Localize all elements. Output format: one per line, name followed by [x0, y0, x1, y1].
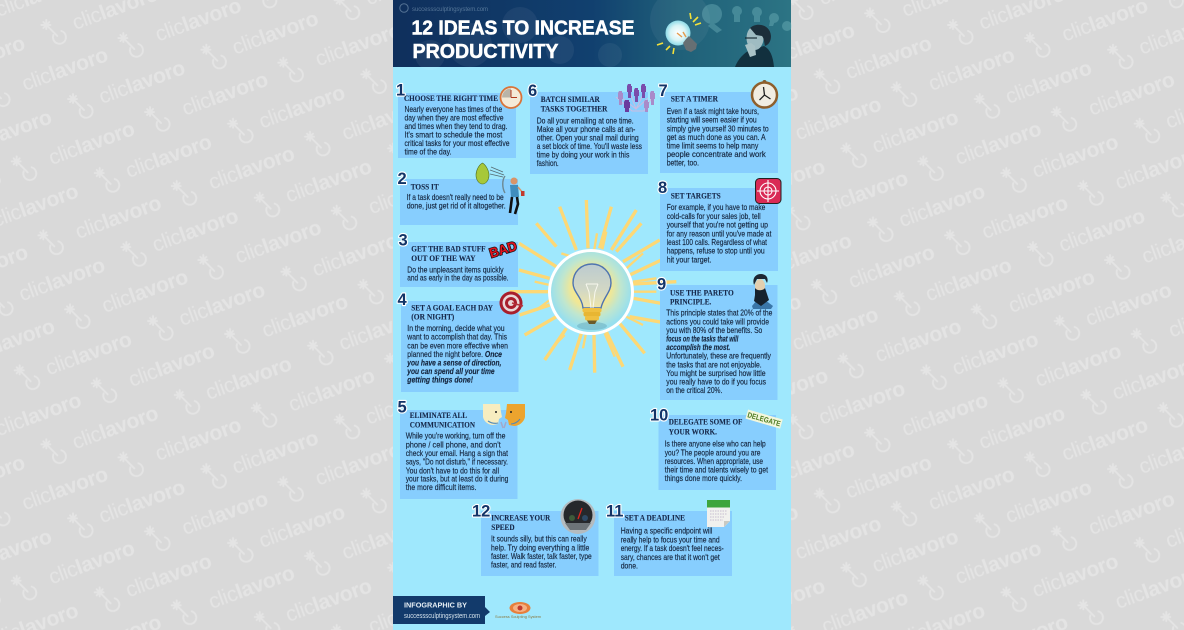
- text block: happens, refuse to stop until you: [667, 247, 765, 256]
- text block: It's smart to schedule the most: [404, 130, 503, 140]
- text block: getting things done!: [406, 375, 473, 384]
- heading: [670, 287, 734, 307]
- number 12: 12: [472, 503, 490, 521]
- number 2: 2: [398, 170, 407, 188]
- heading: TOSS IT: [411, 181, 439, 191]
- text block: a set block of time. You'll waste less: [537, 142, 642, 151]
- text block: day when they are most effective: [404, 114, 504, 122]
- text block: It sounds silly, but this can really: [491, 535, 587, 544]
- text block: sary, chances are that it won't get: [621, 553, 720, 562]
- icon: balloon and man: [476, 163, 524, 214]
- sun rays: [510, 200, 676, 373]
- icon: faint chalk bulbs: [702, 4, 792, 33]
- icon: light bulb: [573, 264, 611, 330]
- heading: SPEED: [491, 522, 515, 532]
- text block: better, too.: [667, 159, 699, 168]
- text block: fashion.: [537, 159, 559, 168]
- panel: card 7 set a timer: [658, 80, 778, 173]
- text block: phone / cell phone, and don't: [406, 440, 501, 449]
- text block: accomplish the most.: [666, 343, 730, 352]
- text block: [407, 193, 506, 210]
- number 10: 10: [650, 406, 668, 424]
- heading: DELEGATE SOME OF: [669, 417, 742, 427]
- text block: time of the day.: [404, 148, 452, 156]
- number 8: 8: [658, 179, 667, 197]
- text block: [406, 432, 509, 492]
- text block: yourself that you're not getting up: [667, 221, 768, 230]
- heading: (OR NIGHT): [411, 312, 454, 322]
- panel: card 1 choose the right time: [396, 82, 522, 158]
- footer tag: INFOGRAPHIC BY: [404, 601, 467, 610]
- text block: least 100 calls. Regardless of what: [667, 238, 768, 247]
- text block: For example, if you have to make: [667, 203, 766, 212]
- text block: can be even more effective when: [407, 341, 508, 350]
- panel: card 12 increase speed: [472, 499, 598, 576]
- text block: Do the unpleasant items quickly: [407, 265, 504, 274]
- icon: speedometer: [560, 499, 596, 534]
- icon: pocket watch: [752, 80, 777, 108]
- text block: [621, 527, 724, 570]
- icon: red target: [756, 178, 781, 204]
- text block: the more difficult items.: [406, 483, 476, 492]
- text block: get as much done as you can. A: [667, 133, 766, 142]
- panel: card 2 toss it: [398, 163, 524, 225]
- text block: [406, 324, 508, 384]
- text block: energy. If a task doesn't feel neces-: [621, 544, 724, 553]
- text block: faster, and read faster.: [491, 560, 556, 569]
- heading: SET A DEADLINE: [625, 512, 685, 522]
- text block: people concentrate and work: [667, 150, 767, 159]
- text block: planned the night before. Once: [407, 350, 502, 359]
- text block: check your email. Hang a sign that: [406, 449, 509, 458]
- number 5: 5: [398, 398, 407, 416]
- heading: CHOOSE THE RIGHT TIME: [404, 93, 498, 103]
- number 9: 9: [657, 275, 666, 293]
- text block: Even if a task might take hours,: [667, 107, 759, 116]
- heading: OUT OF THE WAY: [411, 253, 476, 263]
- text block: [407, 265, 509, 283]
- text block: time limit seems to help many: [667, 142, 759, 151]
- footer tag: [393, 596, 490, 624]
- heading: TASKS TOGETHER: [541, 103, 608, 113]
- text block: things done more quickly.: [665, 474, 742, 483]
- text block: [665, 440, 769, 483]
- number 1: 1: [396, 82, 405, 100]
- text block: you with 80% of the benefits. So: [666, 326, 763, 335]
- copyright line: [400, 4, 488, 13]
- text block: You might be surprised how little: [666, 369, 766, 378]
- text block: If a task doesn't really need to be: [407, 193, 504, 202]
- text block: [666, 309, 773, 395]
- heading: COMMUNICATION: [410, 419, 476, 429]
- text block: says, "Do not disturb," if necessary.: [406, 458, 508, 467]
- heading: SET A TIMER: [671, 94, 719, 104]
- text block: Having a specific endpoint will: [621, 527, 713, 536]
- text block: help. Try doing everything a little: [491, 543, 590, 552]
- panel: card 3 bad stuff: [398, 232, 519, 287]
- text block: simply give yourself 30 minutes to: [667, 124, 769, 133]
- footer logo: [495, 602, 541, 619]
- text block: Is there anyone else who can help: [665, 440, 766, 449]
- panel: card 6 batch similar tasks: [528, 82, 655, 174]
- heading: [541, 94, 608, 113]
- text block: [404, 105, 510, 156]
- panel: card 11 set a deadline: [606, 500, 732, 576]
- heading: USE THE PARETO: [670, 287, 734, 297]
- icon: clock: [500, 87, 522, 108]
- text block: hit your target.: [667, 255, 711, 264]
- text block: While you're working, turn off the: [406, 432, 506, 441]
- text block: In the morning, decide what you: [407, 324, 505, 333]
- infographic content: [393, 0, 792, 630]
- text block: [537, 116, 642, 168]
- text block: [667, 107, 769, 168]
- heading: SET TARGETS: [671, 191, 721, 201]
- icon: archery target: [500, 292, 523, 314]
- heading: [491, 512, 551, 532]
- text block: Make all your phone calls at an-: [537, 125, 636, 134]
- number 4: 4: [398, 291, 408, 309]
- heading: BATCH SIMILAR: [541, 94, 600, 104]
- text block: resources. When appropriate, use: [665, 457, 763, 466]
- text block: for any reason until you've made at: [667, 229, 772, 238]
- text block: your tasks, but at least do it during: [406, 475, 509, 484]
- icon: delegate tag: DELEGATE: [746, 410, 782, 428]
- text block: Unfortunately, these are frequently: [666, 352, 772, 361]
- heading: SET A GOAL EACH DAY: [411, 302, 494, 312]
- infographic panel background: [393, 0, 791, 630]
- heading: [411, 302, 494, 322]
- heading: GET THE BAD STUFF: [411, 244, 486, 254]
- text block: focus on the tasks that will: [666, 335, 739, 344]
- footer tag: successsculptingsystem.com: [404, 613, 480, 620]
- text block: faster. Walk faster, talk faster, type: [491, 552, 592, 561]
- text block: their time and talents wisely to get: [665, 466, 769, 475]
- text block: done.: [621, 561, 638, 570]
- icon: Pareto portrait: [752, 274, 773, 309]
- text block: other. Open your snail mail during: [537, 133, 639, 142]
- title: PRODUCTIVITY: [412, 40, 559, 63]
- central bulb with sun rays: [510, 200, 676, 373]
- header banner: [393, 0, 792, 70]
- bulb disc: [550, 250, 632, 334]
- number 11: 11: [606, 503, 623, 521]
- icon: people network: [616, 84, 655, 112]
- heading: INCREASE YOUR: [491, 512, 551, 522]
- text block: starting will seem easier if you: [667, 116, 757, 125]
- panel: card 8 set targets: [658, 178, 781, 271]
- icon: thinking man: [735, 25, 774, 67]
- icon: talking masks: [483, 404, 525, 428]
- heading: [411, 244, 486, 263]
- panel: card 9 pareto: [657, 274, 778, 400]
- title: 12 IDEAS TO INCREASE: [412, 16, 634, 40]
- heading: YOUR WORK.: [669, 426, 717, 436]
- text block: actions you could take will provide: [666, 317, 769, 326]
- text block: critical tasks for your most effective: [404, 139, 510, 148]
- copyright line: successsculptingsystem.com: [412, 7, 488, 13]
- text block: you have a sense of direction,: [406, 358, 501, 367]
- icon: calendar: [707, 500, 730, 527]
- panel: card 4 set a goal: [398, 291, 523, 392]
- icon: lit bulb: [657, 13, 701, 54]
- text block: really help to focus your time and: [621, 535, 720, 544]
- text block: you can spend all your time: [406, 367, 495, 376]
- text block: [667, 203, 772, 264]
- number 3: 3: [398, 232, 408, 250]
- heading: [410, 410, 476, 429]
- heading: [669, 417, 742, 436]
- text block: time by doing your work in this: [537, 150, 629, 159]
- text block: Nearly everyone has times of the: [404, 105, 503, 114]
- heading: PRINCIPLE.: [670, 297, 711, 307]
- text block: Do all your emailing at one time.: [537, 116, 634, 125]
- icon: BAD stamp: BAD: [487, 238, 519, 261]
- text block: on the critical 20%.: [666, 386, 722, 395]
- panel: card 10 delegate: [650, 406, 783, 490]
- text block: the tasks that are not enjoyable.: [666, 360, 762, 369]
- text block: done, just get rid of it altogether.: [407, 201, 506, 210]
- heading: ELIMINATE ALL: [410, 410, 467, 420]
- text block: want to accomplish that day. This: [406, 333, 507, 342]
- text block: you really have to do if you focus: [666, 378, 766, 387]
- number 7: 7: [658, 82, 668, 100]
- text block: You don't have to do this for all: [406, 466, 499, 475]
- text block: cold-calls for your sales job, tell: [667, 212, 761, 221]
- footer logo: Success Sculpting System: [495, 615, 541, 619]
- text block: and times when they tend to drag.: [404, 122, 508, 131]
- text block: and as early in the day as possible.: [407, 274, 509, 283]
- number 6: 6: [528, 82, 537, 100]
- text block: This principle states that 20% of the: [666, 309, 773, 318]
- panel: card 5 eliminate communication: [398, 398, 525, 499]
- title: [412, 16, 634, 63]
- text block: you? The people around you are: [665, 448, 761, 457]
- text block: [491, 535, 592, 569]
